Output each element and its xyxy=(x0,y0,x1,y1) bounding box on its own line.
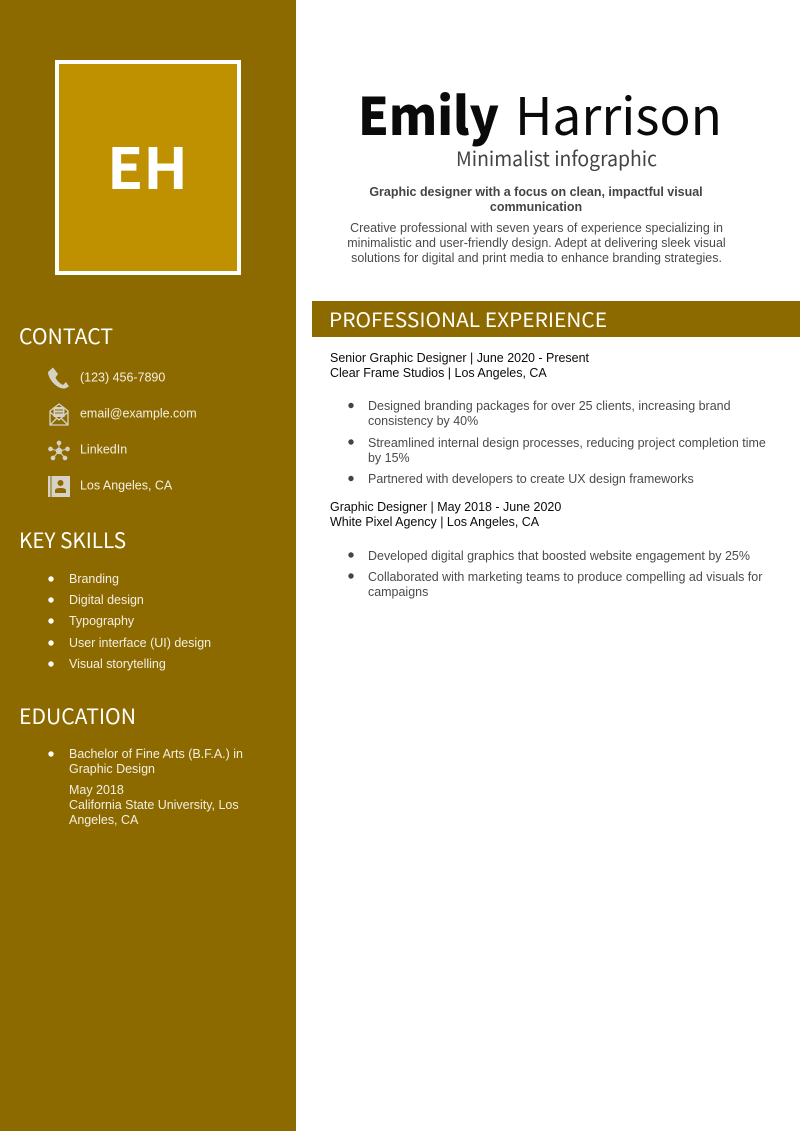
summary paragraph xyxy=(347,221,726,265)
heading: contact: CONTACT xyxy=(19,321,113,351)
LinkedIn label: LinkedIn xyxy=(80,442,127,456)
email address: email@example.com xyxy=(80,406,197,420)
education details: Angeles, CA xyxy=(69,813,139,827)
skills list: User interface (UI) design xyxy=(69,636,211,650)
summary paragraph: Creative professional with seven years of experience specializing in xyxy=(350,221,723,235)
heading: education: EDUCATION xyxy=(19,701,136,731)
job 2 bullets: Collaborated with marketing teams to produce compelling ad visuals for xyxy=(368,570,762,584)
skills list: Typography xyxy=(69,614,135,628)
job 1 heading: Clear Frame Studios | Los Angeles, CA xyxy=(330,366,547,380)
subtitle: Minimalist infographic xyxy=(456,143,657,172)
skills list xyxy=(48,572,211,671)
name title: Harrison xyxy=(515,75,722,150)
name title: Emily xyxy=(358,75,499,150)
job 1 bullets: consistency by 40% xyxy=(368,414,478,428)
job 1 bullets: Streamlined internal design processes, reducing project completion time xyxy=(368,436,766,450)
location: Los Angeles, CA xyxy=(80,478,173,492)
job 1 bullets: Partnered with developers to create UX design frameworks xyxy=(368,472,694,486)
job 2 heading: White Pixel Agency | Los Angeles, CA xyxy=(330,515,540,529)
education details xyxy=(48,747,243,827)
education details: Graphic Design xyxy=(69,762,155,776)
panel: sidebar xyxy=(0,0,296,1131)
job 1 heading xyxy=(330,351,590,380)
icon: email xyxy=(50,404,68,425)
phone number: (123) 456-7890 xyxy=(80,370,165,384)
job 2 heading xyxy=(330,500,561,529)
job 2 heading: Graphic Designer | May 2018 - June 2020 xyxy=(330,500,561,514)
summary paragraph: minimalistic and user-friendly design. Adept at delivering sleek visual xyxy=(347,236,726,250)
icon: network xyxy=(49,441,69,460)
tagline: Graphic designer with a focus on clean, impactful visual xyxy=(369,185,703,199)
contact list xyxy=(48,368,197,497)
skills list: Branding xyxy=(69,572,119,586)
icon: phone xyxy=(48,368,69,389)
job 1 heading: Senior Graphic Designer | June 2020 - Present xyxy=(330,351,590,365)
education details: May 2018 xyxy=(69,783,124,797)
monogram box xyxy=(57,62,239,273)
summary paragraph: solutions for digital and print media to enhance branding strategies. xyxy=(351,251,722,265)
name title xyxy=(358,75,722,150)
skills list: Visual storytelling xyxy=(69,657,166,671)
section header: professional experience: PROFESSIONAL EXPERIENCE xyxy=(329,304,607,333)
icon: address book xyxy=(48,476,70,497)
monogram box: EH xyxy=(107,124,188,206)
job 1 bullets: Designed branding packages for over 25 clients, increasing brand xyxy=(368,399,731,413)
education details: Bachelor of Fine Arts (B.F.A.) in xyxy=(69,747,243,761)
heading: key skills: KEY SKILLS xyxy=(19,525,126,555)
job 1 bullets xyxy=(348,399,766,486)
skills list: Digital design xyxy=(69,593,144,607)
section header: professional experience xyxy=(312,301,800,337)
job 2 bullets: Developed digital graphics that boosted website engagement by 25% xyxy=(368,549,750,563)
job 2 bullets xyxy=(348,549,762,599)
tagline xyxy=(369,185,703,214)
job 2 bullets: campaigns xyxy=(368,585,428,599)
tagline: communication xyxy=(490,200,582,214)
education details: California State University, Los xyxy=(69,798,239,812)
job 1 bullets: by 15% xyxy=(368,451,410,465)
